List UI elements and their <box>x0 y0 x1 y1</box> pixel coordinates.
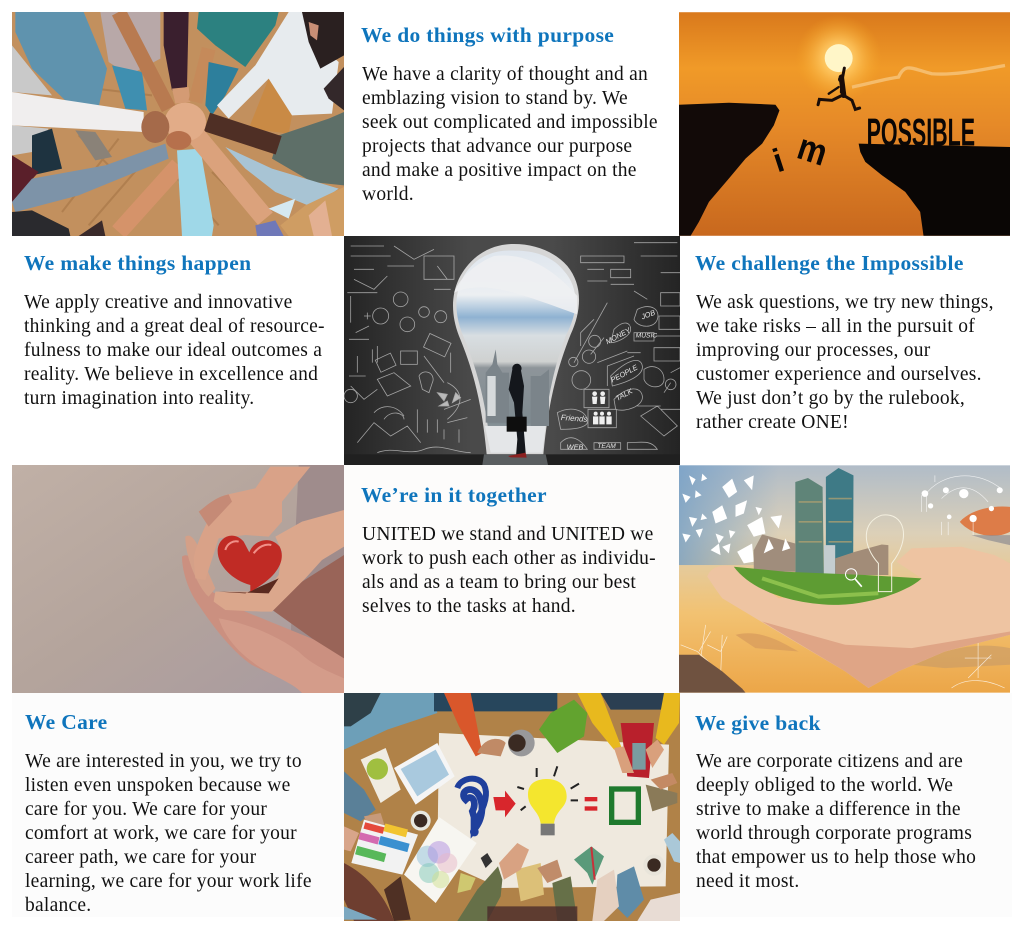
photo: woman at lightbulb doorway on chalkboard: JOB <box>639 308 657 322</box>
photo: woman at lightbulb doorway on chalkboard <box>344 236 680 465</box>
text: challenge body: improving our processes, our <box>696 340 930 361</box>
text: purpose body: and make a positive impact on the <box>362 160 637 181</box>
text: challenge body: rather create ONE! <box>696 412 849 433</box>
panel: together cell background <box>344 465 680 693</box>
text: purpose body: projects that advance our purpose <box>362 136 632 157</box>
photo: hand holding green city <box>679 465 1010 693</box>
text: together body: UNITED we stand and UNITED we <box>362 524 654 545</box>
text: we care body: care for you. We care for your <box>25 799 267 820</box>
text: together body: work to push each other as individu- <box>362 548 656 569</box>
text: we care body <box>25 751 312 916</box>
text: challenge body: customer experience and ourselves. <box>696 364 982 385</box>
photo: woman at lightbulb doorway on chalkboard: MUSIC <box>636 332 657 339</box>
photo: joined hands <box>12 12 344 236</box>
photo: woman at lightbulb doorway on chalkboard: TEAM <box>597 443 616 450</box>
text: give back body: need it most. <box>696 871 799 892</box>
text: challenge body <box>696 292 994 433</box>
photo: leap over the impossible gap <box>679 12 1010 236</box>
heading: we make things happen: We make things happen <box>24 251 251 275</box>
text: challenge body: We just don’t go by the rulebook, <box>696 388 965 409</box>
text: make things happen body: reality. We believe in excellence and <box>24 364 318 385</box>
text: purpose body <box>362 64 658 205</box>
text: make things happen body: fulness to make our ideal outcomes a <box>24 340 322 361</box>
text: give back body: We are corporate citizens and are <box>696 751 963 772</box>
heading: we do things with purpose: We do things with purpose <box>361 23 614 47</box>
text: challenge body: We ask questions, we try new things, <box>696 292 994 313</box>
text: make things happen body: thinking and a great deal of resource- <box>24 316 325 337</box>
heading: we care: We Care <box>25 710 108 734</box>
panel: we give back background <box>680 693 1012 917</box>
text: purpose body: world. <box>362 184 414 205</box>
text: together body: als and as a team to bring our best <box>362 572 636 593</box>
text: make things happen body: turn imagination into reality. <box>24 388 254 409</box>
text: together body <box>362 524 656 617</box>
heading: we give back: We give back <box>695 711 821 735</box>
photo: hands holding red heart <box>12 465 344 693</box>
text: challenge body: we take risks – all in the pursuit of <box>696 316 975 337</box>
text: together body: selves to the tasks at hand. <box>362 596 576 617</box>
text: we care body: balance. <box>25 895 91 916</box>
photo: woman at lightbulb doorway on chalkboard: PEOPLE <box>609 363 639 384</box>
photo: leap over the impossible gap: i <box>769 142 789 180</box>
photo: leap over the impossible gap: m <box>793 125 833 174</box>
text: purpose body: We have a clarity of thought and an <box>362 64 648 85</box>
text: make things happen body: We apply creative and innovative <box>24 292 292 313</box>
heading: we're in it together: We’re in it together <box>361 483 547 507</box>
photo: woman at lightbulb doorway on chalkboard: TALK <box>614 386 635 403</box>
photo: team around table with idea sketches <box>344 693 680 921</box>
photo: woman at lightbulb doorway on chalkboard: WEB <box>567 442 583 451</box>
text: give back body <box>696 751 976 892</box>
heading: we challenge the impossible: We challenge the Impossible <box>695 251 964 275</box>
text: we care body: listen even unspoken because we <box>25 775 290 796</box>
text: give back body: world through corporate programs <box>696 823 972 844</box>
text: we care body: career path, we care for your <box>25 847 256 868</box>
text: give back body: deeply obliged to the world. We <box>696 775 953 796</box>
text: make things happen body <box>24 292 325 409</box>
photo: woman at lightbulb doorway on chalkboard: Friends <box>561 413 588 424</box>
text: we care body: learning, we care for your work life <box>25 871 312 892</box>
text: give back body: that empower us to help those who <box>696 847 976 868</box>
text: purpose body: emblazing vision to stand by. We <box>362 88 628 109</box>
photo: woman at lightbulb doorway on chalkboard: MONEY <box>604 325 633 346</box>
panel: we care background <box>12 693 344 917</box>
text: we care body: We are interested in you, we try to <box>25 751 302 772</box>
text: purpose body: seek out complicated and impossible <box>362 112 658 133</box>
text: we care body: comfort at work, we care for your <box>25 823 297 844</box>
text: give back body: strive to make a difference in the <box>696 799 961 820</box>
